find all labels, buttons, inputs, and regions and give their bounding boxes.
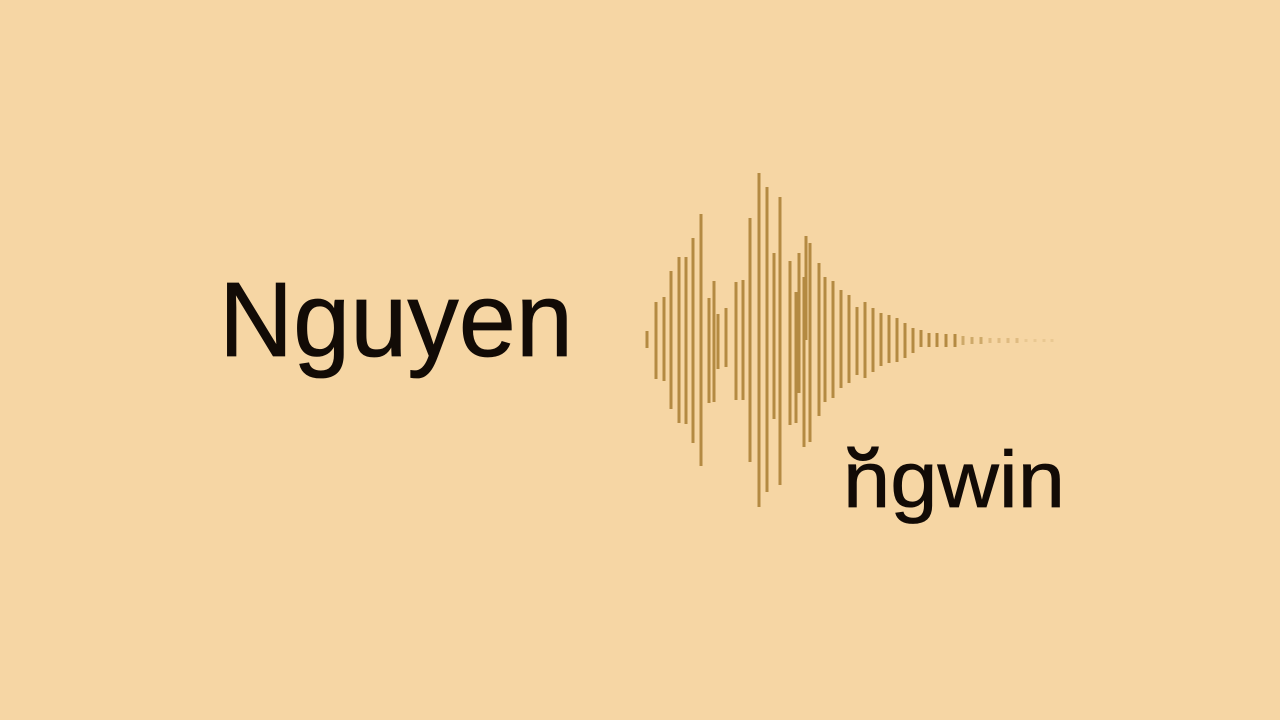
phonetic respelling: ngwin <box>843 435 1065 524</box>
name: Nguyen: Nguyen <box>219 261 573 379</box>
breve mark: ˘ <box>847 432 880 534</box>
icon: sound waveform <box>647 173 1052 507</box>
